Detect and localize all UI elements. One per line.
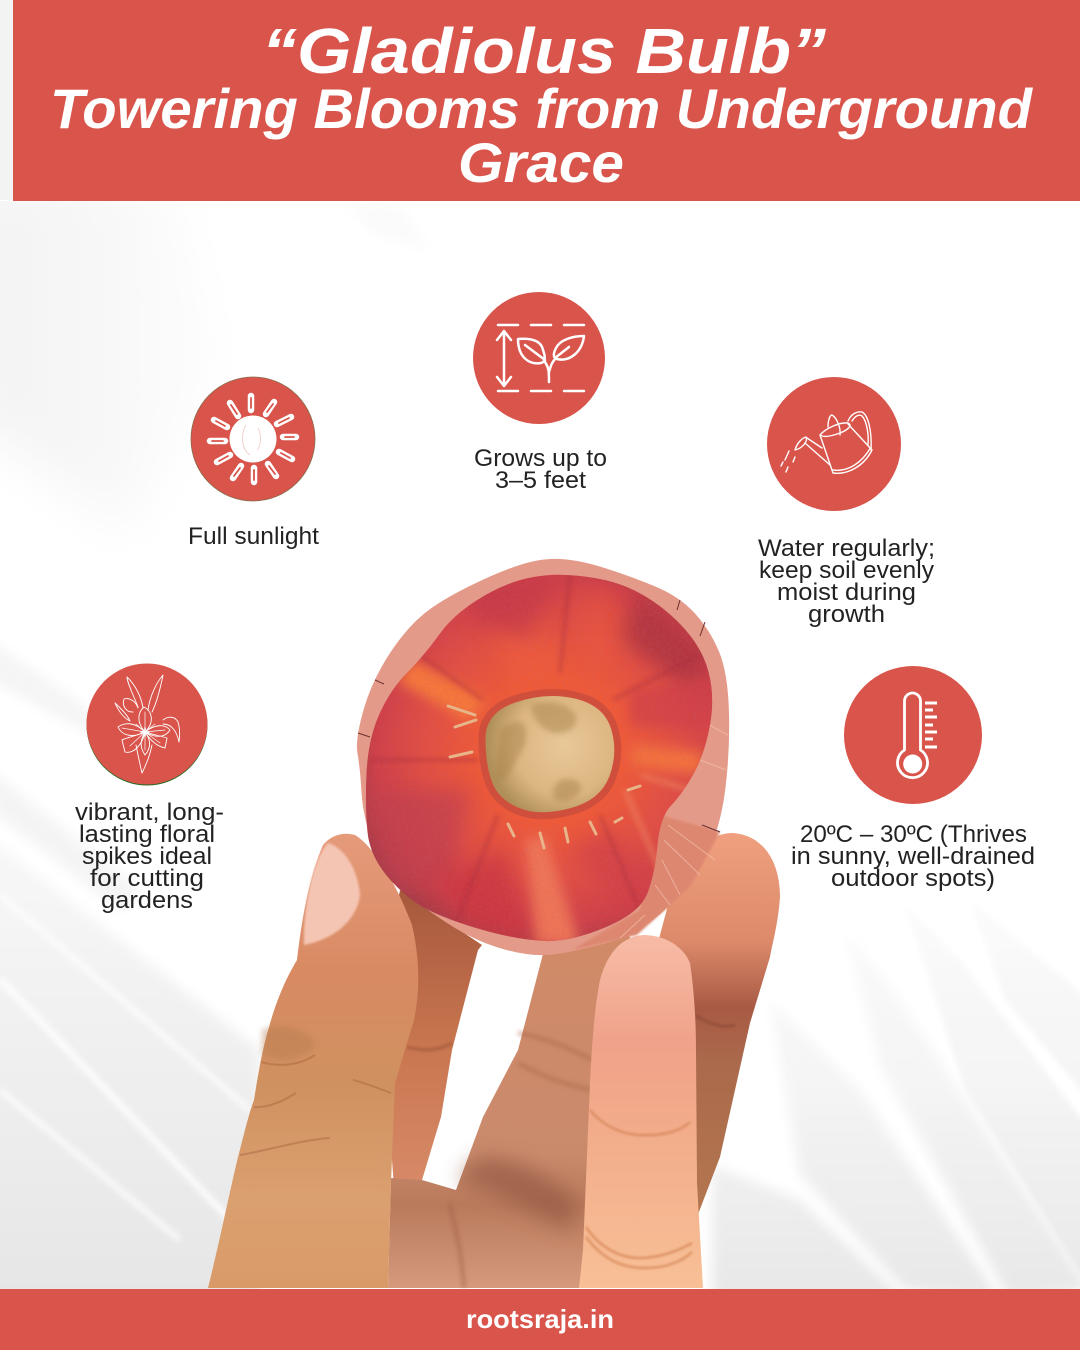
title [50, 15, 1034, 194]
header band [0, 0, 1080, 201]
feature: floral spikes [75, 664, 224, 914]
feature: watering [758, 377, 935, 628]
right finger [640, 833, 780, 1217]
label: temperature range: in sunny, well-drained [791, 843, 1035, 870]
thumb [208, 834, 418, 1288]
label: grows up to 3–5 feet [474, 445, 607, 494]
footer band [0, 1289, 1080, 1350]
front finger [579, 935, 703, 1288]
label: temperature range: outdoor spots) [831, 865, 995, 892]
label: water regularly: moist during [777, 579, 916, 606]
label: vibrant floral spikes: spikes ideal [82, 843, 212, 870]
hand holding bulb [208, 833, 780, 1288]
label: water regularly: Water regularly; [758, 535, 935, 562]
label: vibrant floral spikes: for cutting [90, 865, 204, 892]
feature: temperature [791, 666, 1035, 892]
icon: plant height [473, 292, 605, 424]
skin cracks [358, 600, 720, 832]
label: vibrant floral spikes: vibrant, long- [75, 799, 224, 826]
title: “Gladiolus Bulb” [262, 15, 826, 87]
feature: height [473, 292, 607, 494]
label: water regularly: growth [808, 601, 885, 628]
feature: sunlight [188, 377, 319, 550]
label: water regularly: keep soil evenly [759, 557, 934, 584]
label: full sunlight: Full sunlight [188, 523, 319, 550]
red flesh [366, 575, 712, 941]
index finger [380, 890, 482, 1200]
label: temperature range: 20ºC – 30ºC (Thrives [800, 821, 1027, 848]
icon: gladiolus flower [86, 664, 208, 786]
label: grows up to 3–5 feet: 3–5 feet [495, 467, 586, 494]
website address: rootsraja.in [466, 1304, 614, 1334]
title: Grace [458, 131, 624, 194]
title: Towering Blooms from Underground [50, 77, 1034, 140]
icon: thermometer [844, 666, 982, 804]
label: vibrant floral spikes: gardens [101, 887, 193, 914]
label: temperature range [791, 821, 1035, 892]
central basal plate [448, 692, 640, 848]
icon: sun [191, 377, 315, 501]
label: water regularly [758, 535, 935, 628]
label: vibrant floral spikes [75, 799, 224, 914]
gladiolus bulb [357, 559, 729, 955]
label: grows up to 3–5 feet: Grows up to [474, 445, 607, 472]
outer skin [357, 559, 729, 955]
icon: watering can [767, 377, 901, 511]
thumbnail [304, 843, 360, 945]
flesh shading and grooves [360, 570, 720, 950]
label: vibrant floral spikes: lasting floral [79, 821, 215, 848]
palm and middle finger [388, 925, 700, 1288]
